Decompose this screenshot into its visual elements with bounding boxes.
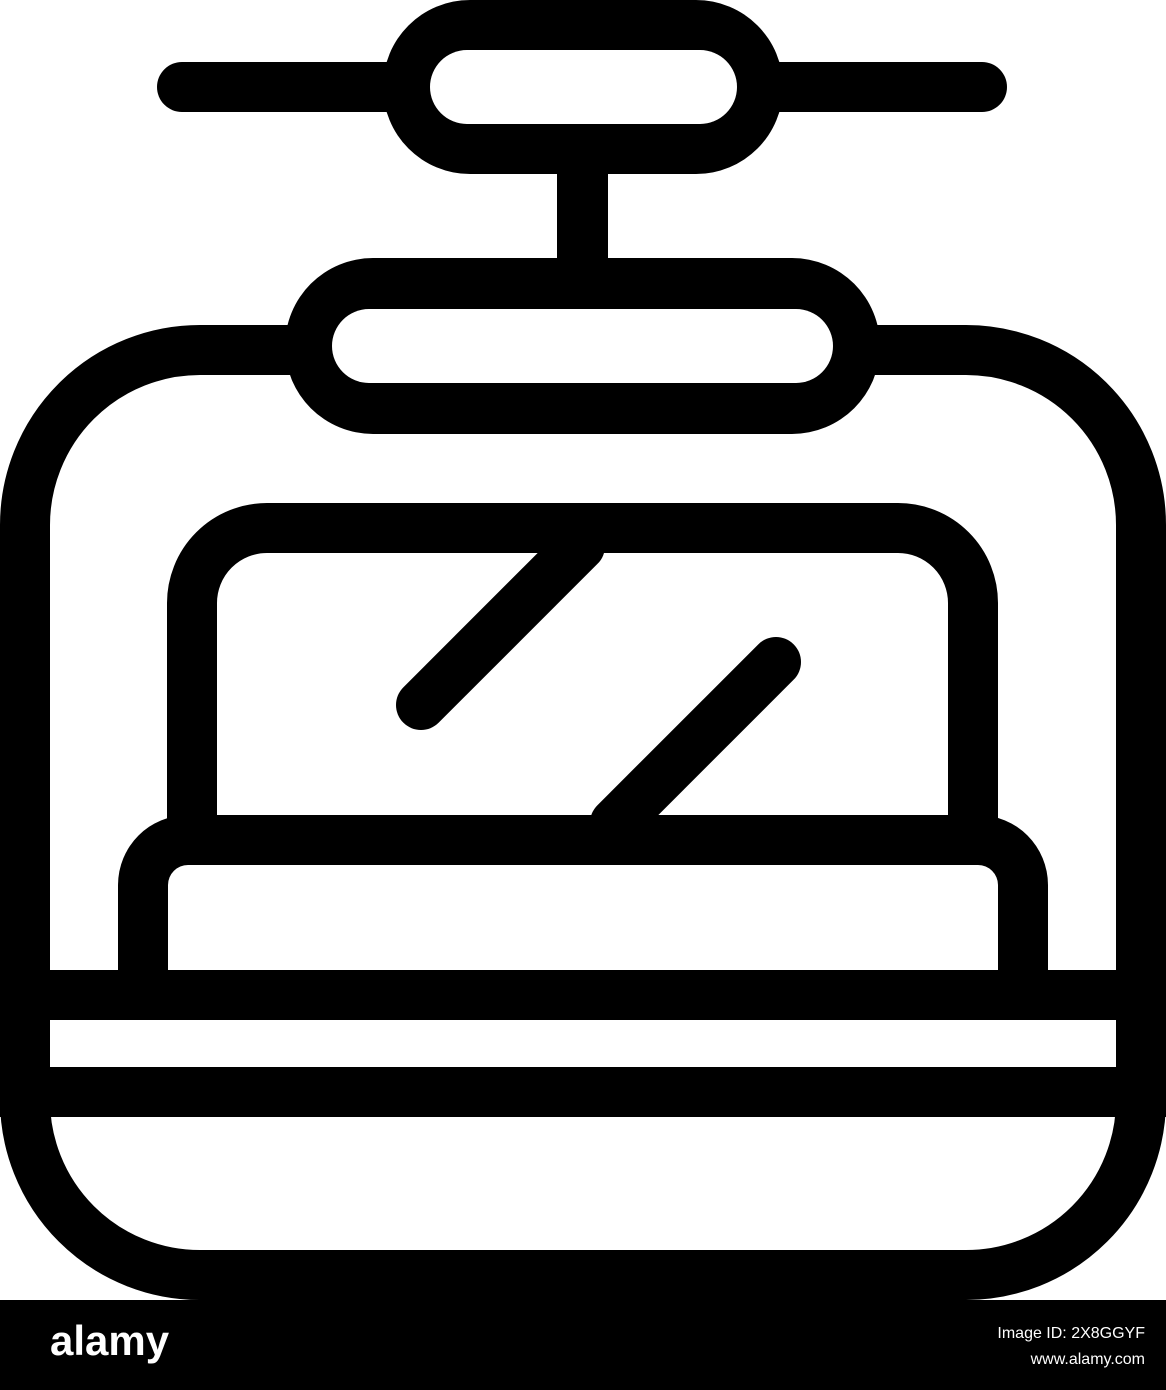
cable line [182, 62, 982, 112]
stem [557, 170, 608, 262]
watermark bar: www.alamy.com [1030, 1351, 1145, 1368]
watermark bar: alamy [50, 1317, 170, 1364]
top clamp [383, 0, 783, 174]
watermark bar: Image ID: 2X8GGYF [997, 1325, 1145, 1342]
seat [118, 815, 1048, 1065]
cabin body [25, 350, 1141, 1275]
lower clamp [285, 258, 880, 434]
window [192, 528, 973, 928]
bottom bands [0, 970, 1166, 1117]
watermark bar [0, 1300, 1166, 1390]
